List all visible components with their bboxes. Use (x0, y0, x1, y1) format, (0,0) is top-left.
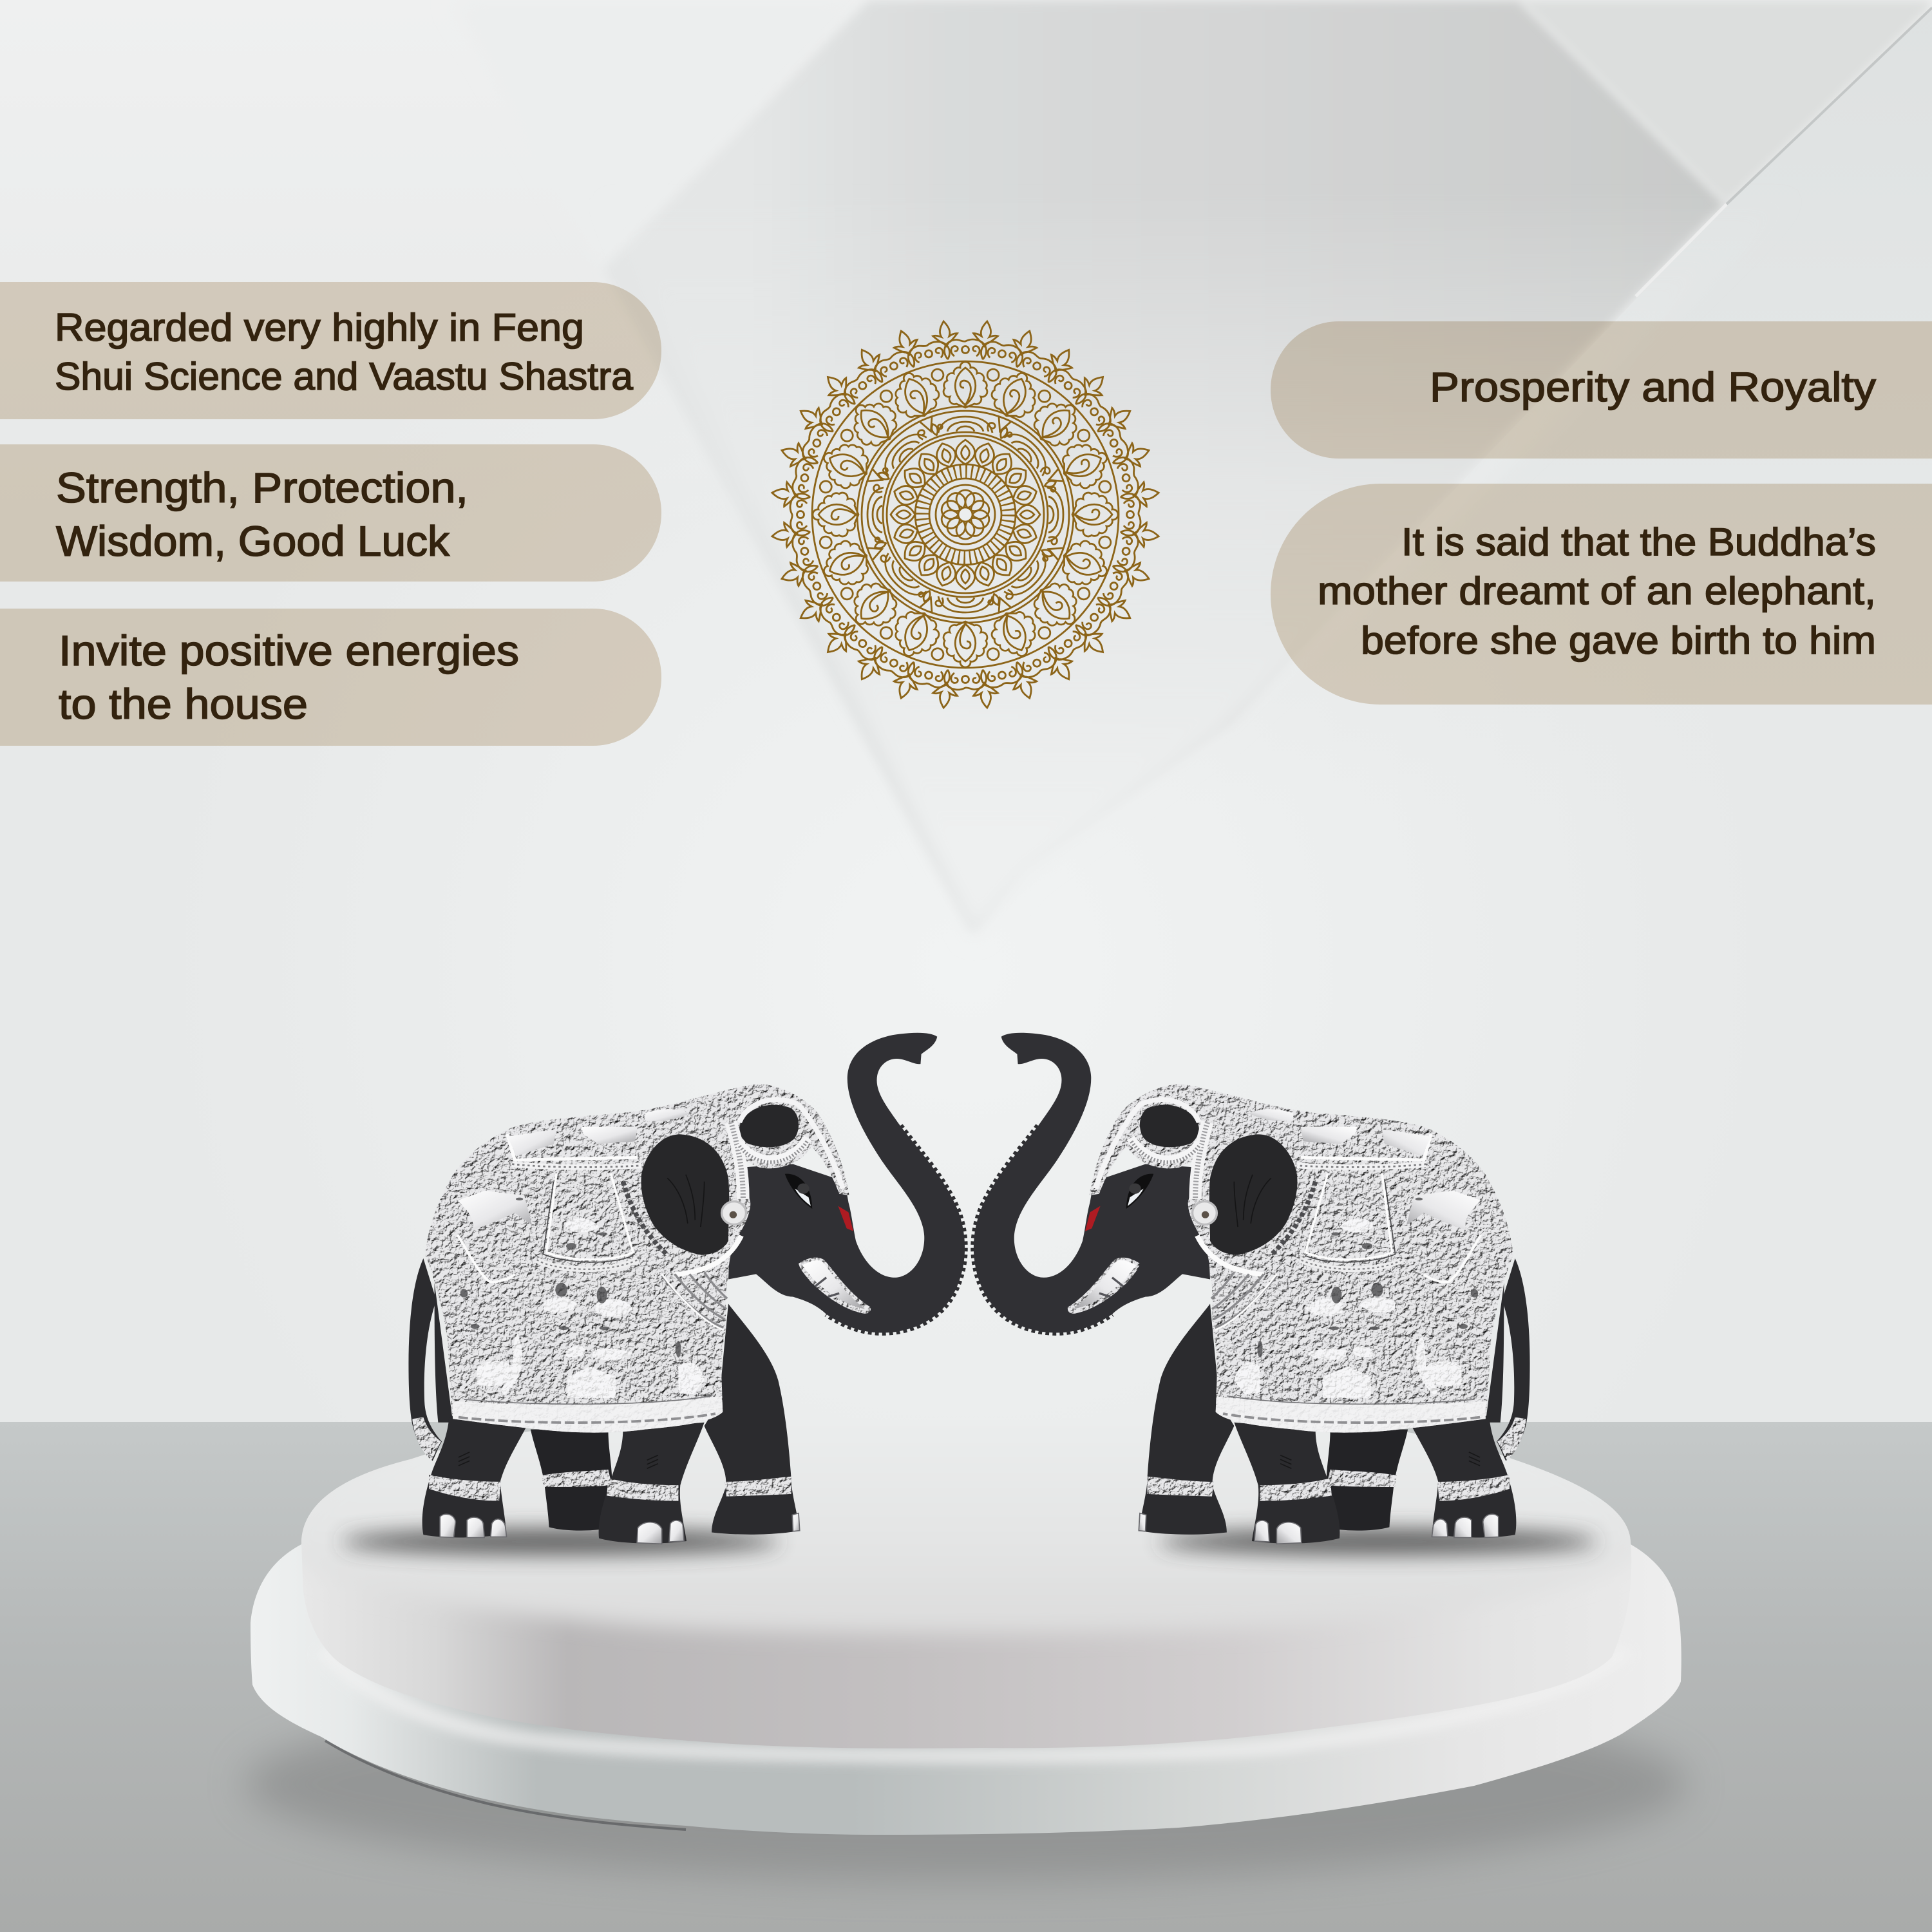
callout: strength: Wisdom, Good Luck (56, 517, 450, 565)
callout: Feng Shui: Shui Science and Vaastu Shastra (55, 355, 634, 398)
callout: strength (0, 444, 661, 582)
callout: positive energies: to the house (59, 680, 308, 728)
callout: Feng Shui: Regarded very highly in Feng (55, 306, 584, 349)
callout: Buddha (1271, 484, 1932, 705)
background wall (0, 0, 1932, 1481)
elephant: left (408, 1033, 968, 1544)
callout: positive energies (0, 609, 661, 746)
callout: Buddha: It is said that the Buddha’s (1401, 520, 1876, 564)
shadow: right elephant (1159, 1529, 1597, 1555)
platform (245, 1372, 1687, 1880)
mandala (768, 317, 1162, 712)
floor (0, 1422, 1932, 1932)
callout: positive energies: Invite positive energies (59, 627, 519, 674)
callout: prosperity (1271, 321, 1932, 459)
callout: Feng Shui (0, 282, 661, 419)
callout: Buddha: mother dreamt of an elephant, (1318, 569, 1876, 612)
callout: Buddha: before she gave birth to him (1361, 619, 1876, 662)
callout: prosperity: Prosperity and Royalty (1430, 364, 1876, 410)
elephant: right (971, 1033, 1530, 1544)
callout: strength: Strength, Protection, (56, 464, 468, 511)
shadow: left elephant (341, 1529, 779, 1555)
